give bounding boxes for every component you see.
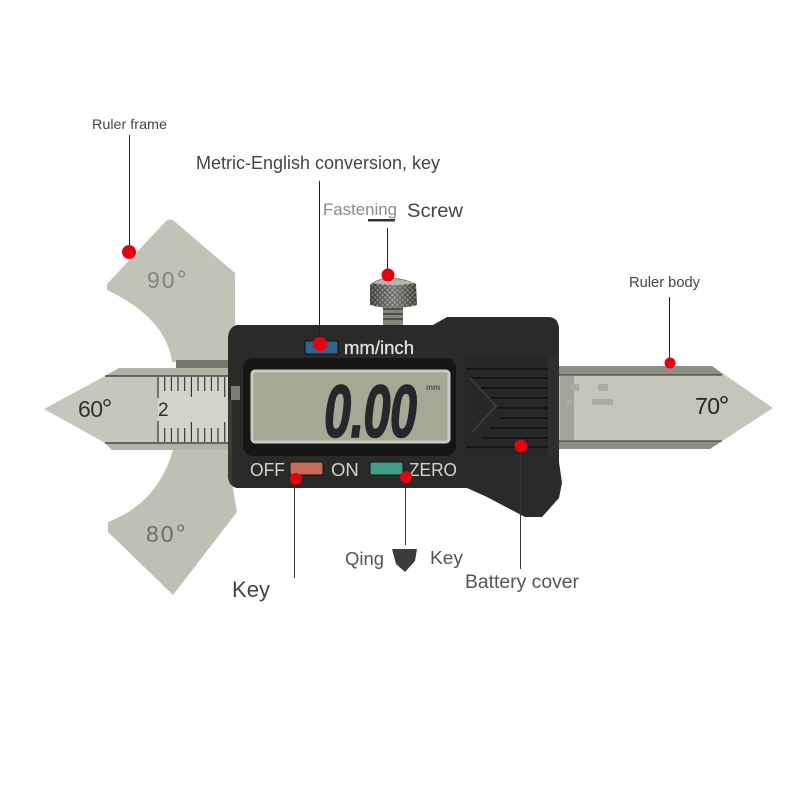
label: metric-English conversion key: Metric-English conversion, key	[196, 153, 440, 173]
label: 60 degrees: °	[102, 394, 112, 424]
mm/inch button	[305, 341, 338, 354]
label: battery cover: Battery cover	[465, 572, 580, 593]
fastening screw knob	[370, 278, 417, 326]
zero button	[370, 462, 403, 475]
digital caliper body	[228, 317, 562, 517]
mm/inch label: mm/inch	[344, 338, 414, 358]
leader: power key	[290, 473, 302, 578]
label: ruler frame: Ruler frame	[92, 116, 167, 132]
label: ruler body: Ruler body	[629, 275, 701, 291]
label: clear key	[345, 547, 464, 572]
ruler frame: upper 90 degree jaw	[107, 220, 235, 369]
side notch	[231, 386, 240, 400]
label: clear key: Key	[430, 547, 464, 568]
label: fastening screw: Screw	[407, 200, 464, 222]
scale ticks	[158, 377, 225, 442]
icon: blurred clear glyph	[392, 549, 417, 572]
label: 70 degrees: 70	[695, 393, 720, 419]
LCD reading: 0.00	[324, 371, 417, 454]
leader: clear key	[400, 471, 412, 545]
label: 90 degrees: 90°	[147, 266, 189, 294]
leader: battery cover	[514, 440, 528, 569]
label: clear key: Qing	[345, 548, 384, 569]
LCD bezel	[243, 358, 456, 456]
ruler body: right 70 degree bar	[555, 366, 773, 449]
power button	[290, 462, 323, 475]
leader: metric-English key	[313, 181, 327, 351]
label: fastening screw: Fastening	[323, 201, 397, 219]
label: 60 degrees: 60	[78, 396, 103, 422]
battery cover	[465, 357, 559, 455]
ruler frame: left 60 degree bar with scale	[44, 368, 232, 450]
OFF label: OFF	[250, 459, 285, 480]
label: key: Key	[232, 577, 270, 602]
label: fastening screw	[323, 200, 464, 222]
ON label: ON	[331, 459, 359, 480]
leader: fastening screw	[382, 228, 394, 282]
leader: ruler frame	[122, 135, 136, 259]
leader: ruler body	[664, 297, 676, 368]
faint pixel blocks	[566, 384, 613, 406]
label: 80 degrees: 80°	[146, 520, 188, 548]
ruler frame: lower 80 degree jaw	[108, 450, 237, 595]
smudge under label	[368, 219, 395, 222]
label: scale number: 2	[158, 400, 169, 421]
LCD screen	[252, 371, 449, 454]
ZERO label: ZERO	[409, 459, 457, 480]
label: 70 degrees: °	[719, 391, 729, 421]
LCD unit: mm	[426, 383, 440, 392]
